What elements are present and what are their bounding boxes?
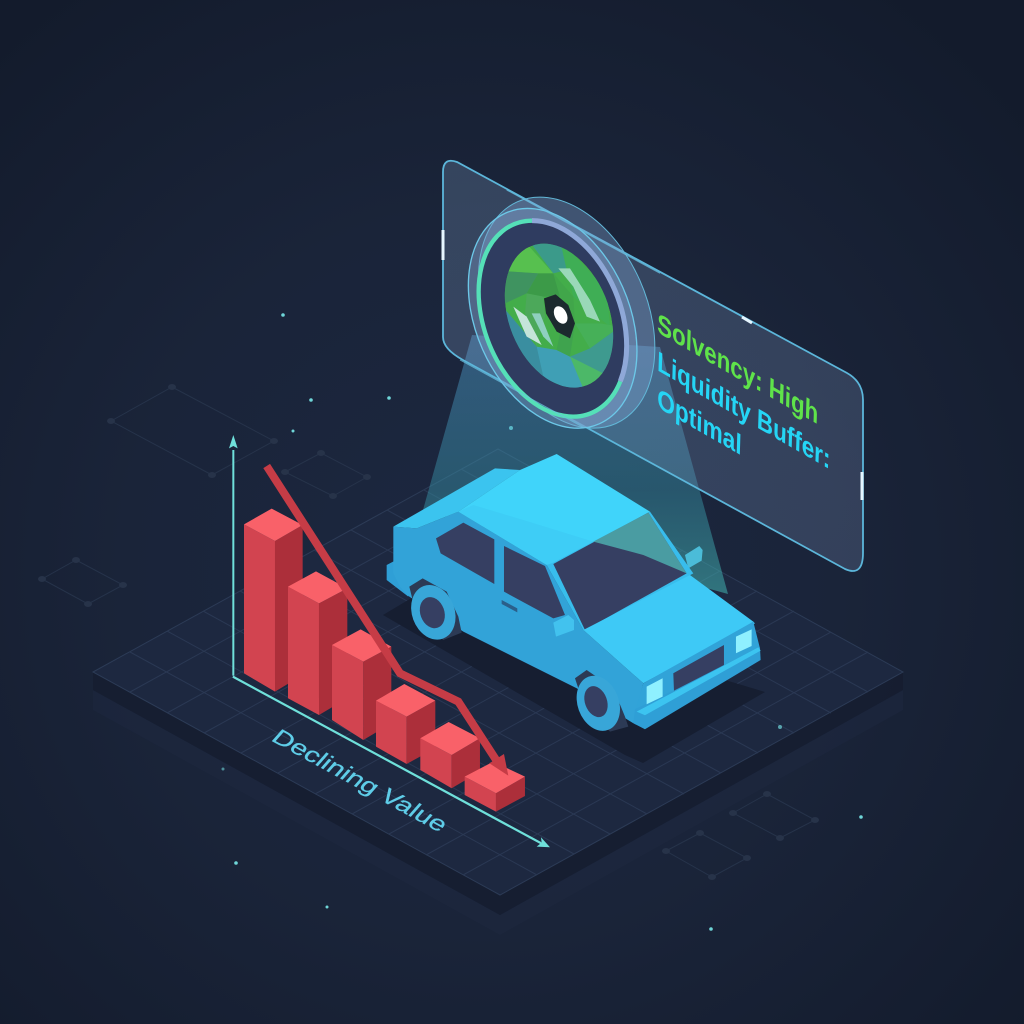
hood [583, 575, 755, 683]
axis label: Declining Value [266, 725, 453, 837]
car ground shadow [383, 590, 765, 763]
green ring [479, 221, 620, 417]
dark barrel [451, 198, 654, 439]
door handle [502, 600, 517, 612]
rear window [436, 523, 494, 584]
bar 1 [244, 509, 303, 692]
near mirror [553, 615, 574, 637]
declining trend arrow [267, 466, 508, 776]
windshield frame [547, 512, 693, 632]
holographic glass panel [443, 161, 863, 571]
floor grid platform [93, 449, 903, 935]
panel edges across lens [460, 190, 660, 427]
bumper [633, 647, 761, 729]
light beam [423, 335, 728, 594]
faint circuit diamonds [38, 384, 819, 880]
isometric scene [38, 160, 904, 958]
panel edge highlights [443, 230, 862, 500]
rear deck [393, 468, 520, 528]
iris [504, 244, 614, 388]
right headlight [736, 629, 752, 653]
bar 4 [376, 684, 435, 764]
back glass rim [444, 169, 689, 456]
car [387, 454, 761, 737]
grille [673, 645, 724, 691]
bar 5 [420, 722, 480, 788]
car body side [393, 512, 643, 723]
liquidity text: Liquidity Buffer: [657, 345, 831, 475]
bar 3 [332, 629, 391, 740]
windshield beam reflection [593, 513, 687, 573]
car front [635, 622, 760, 712]
rear wheel [404, 578, 463, 646]
roof pillar shade [458, 505, 593, 565]
rear bumper [387, 561, 410, 597]
windshield [553, 513, 687, 630]
camera lens [460, 190, 660, 429]
bar 6 [465, 762, 525, 812]
far mirror [685, 546, 703, 568]
pupil [544, 294, 575, 338]
roof [458, 454, 650, 565]
optimal text: Optimal [657, 382, 742, 461]
left headlight [647, 678, 663, 704]
door window [504, 546, 565, 618]
front wheel [569, 670, 628, 737]
solvency text: Solvency: High [657, 307, 819, 430]
x axis [232, 676, 550, 847]
pupil highlight [551, 304, 570, 326]
bar 2 [288, 571, 347, 715]
y axis [229, 435, 238, 676]
depreciation bar chart [229, 435, 550, 847]
periwinkle ring [532, 221, 627, 381]
front glass rim [436, 182, 670, 455]
particles [222, 313, 863, 931]
